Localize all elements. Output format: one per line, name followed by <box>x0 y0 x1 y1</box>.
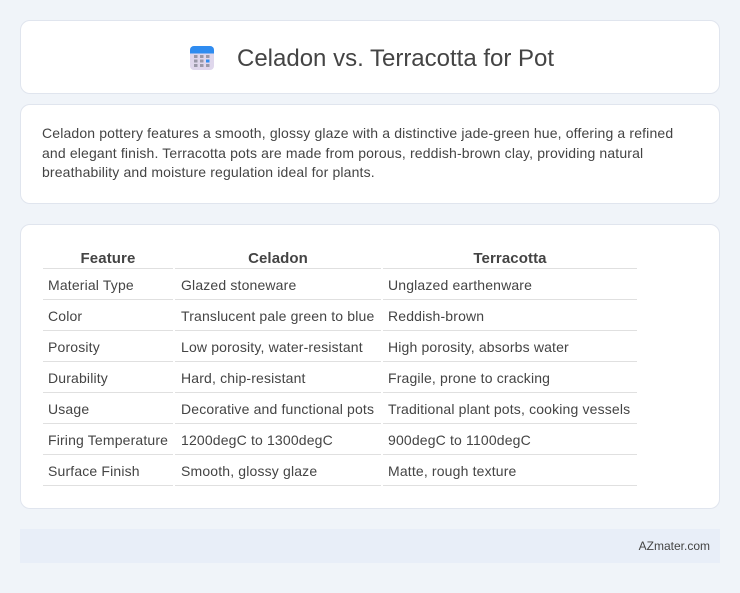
comparison table: Material Type <box>48 277 134 293</box>
comparison table: Celadon <box>248 250 308 266</box>
comparison table: Usage <box>48 401 89 417</box>
footer source text: AZmater.com <box>639 539 710 553</box>
comparison table: Feature <box>81 250 135 266</box>
comparison table: High porosity, absorbs water <box>388 339 569 355</box>
comparison table: 1200degC to 1300degC <box>181 432 333 448</box>
comparison table: Firing Temperature <box>48 432 168 448</box>
comparison table: Surface Finish <box>48 463 140 479</box>
footer <box>20 529 720 563</box>
comparison table: Color <box>48 308 82 324</box>
description text: breathability and moisture regulation ideal for plants. <box>42 164 375 180</box>
comparison table: Translucent pale green to blue <box>181 308 374 324</box>
comparison table: Glazed stoneware <box>181 277 296 293</box>
comparison table: Fragile, prone to cracking <box>388 370 550 386</box>
comparison table: Smooth, glossy glaze <box>181 463 317 479</box>
comparison table: Unglazed earthenware <box>388 277 532 293</box>
comparison table: Reddish-brown <box>388 308 484 324</box>
description text <box>42 125 673 180</box>
comparison table: Porosity <box>48 339 100 355</box>
description text: Celadon pottery features a smooth, glossy glaze with a distinctive jade-green hue, offering a refined <box>42 125 673 141</box>
comparison table: Traditional plant pots, cooking vessels <box>388 401 630 417</box>
comparison table: Terracotta <box>473 250 547 266</box>
heading: Celadon vs. Terracotta for Pot <box>237 45 554 72</box>
icon: calendar <box>190 46 214 70</box>
comparison table: Matte, rough texture <box>388 463 516 479</box>
comparison table: Durability <box>48 370 108 386</box>
comparison table: 900degC to 1100degC <box>388 432 531 448</box>
description text: and elegant finish. Terracotta pots are made from porous, reddish-brown clay, providing natural <box>42 144 643 160</box>
comparison table: Decorative and functional pots <box>181 401 374 417</box>
comparison table <box>43 250 637 486</box>
panel: description <box>20 104 720 204</box>
title card <box>20 20 720 94</box>
panel: comparison table <box>20 224 720 509</box>
comparison table: Low porosity, water-resistant <box>181 339 363 355</box>
comparison table: Hard, chip-resistant <box>181 370 306 386</box>
